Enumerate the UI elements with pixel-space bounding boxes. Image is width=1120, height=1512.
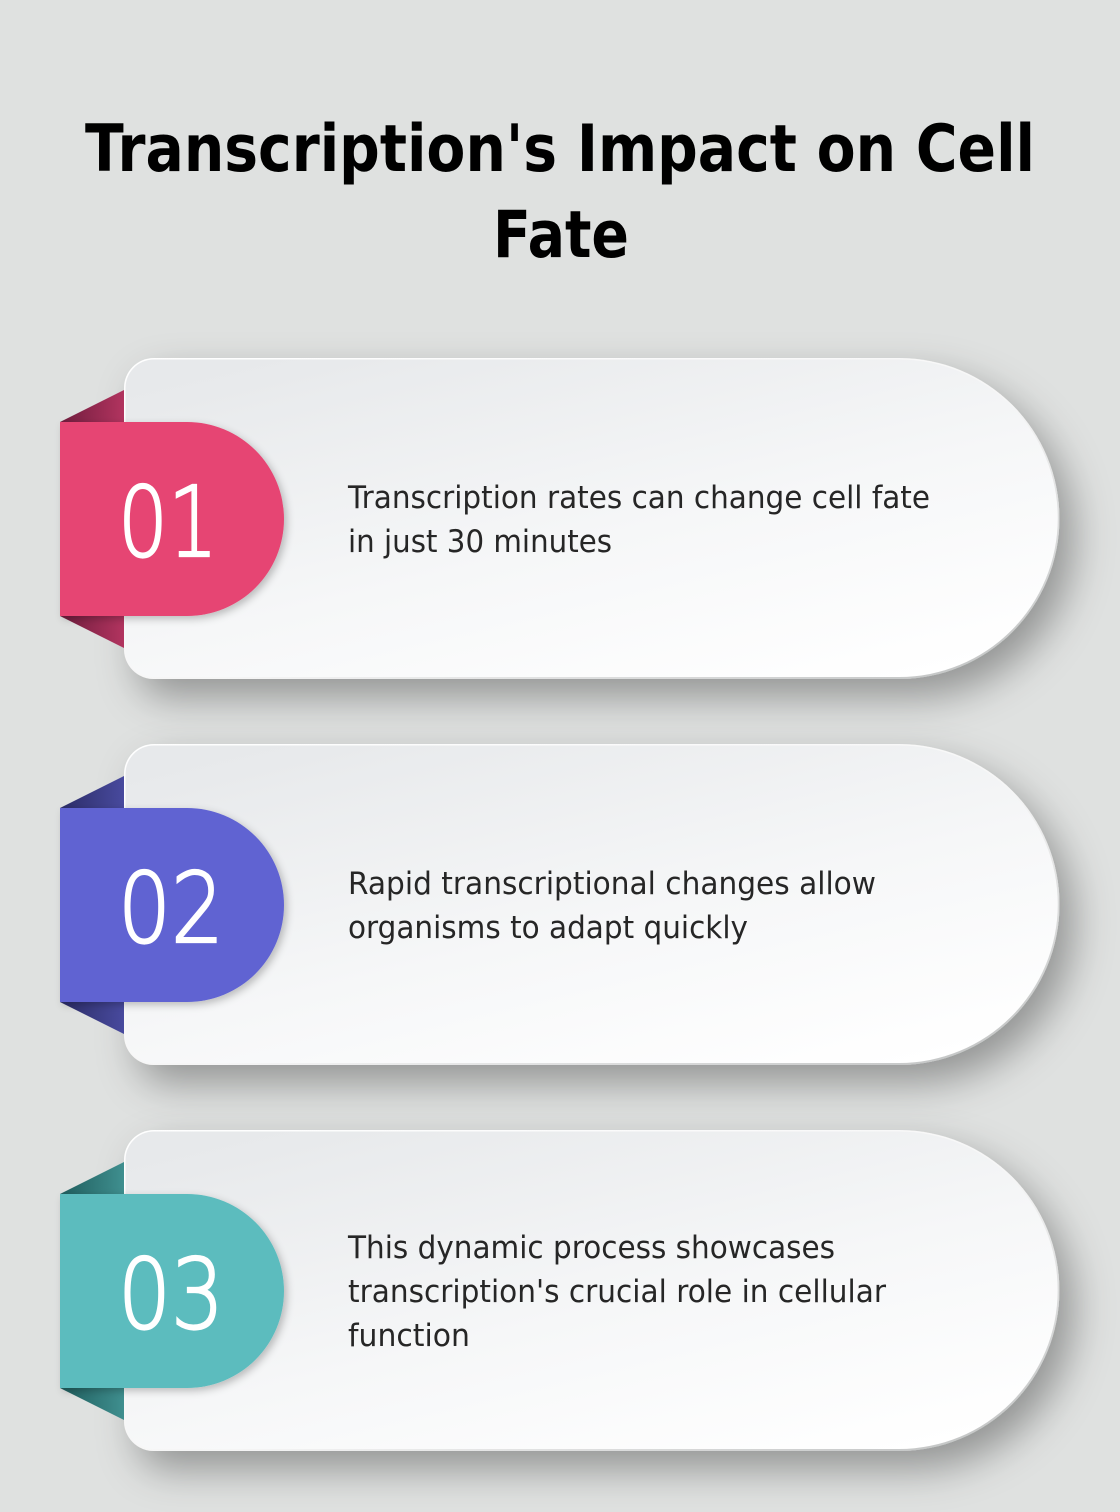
number badge 03 <box>60 1194 284 1388</box>
text 01: in just 30 minutes <box>348 524 612 560</box>
text 02 <box>348 866 876 946</box>
number 03: 03 <box>118 1238 224 1351</box>
panel: step 03 <box>60 1130 1059 1451</box>
panel: step 02 <box>60 744 1060 1065</box>
text 03: transcription's crucial role in cellular <box>348 1274 886 1310</box>
ribbon fold bottom 01 <box>60 616 124 648</box>
ribbon fold bottom 02 <box>60 1002 124 1034</box>
ribbon fold top 01 <box>60 390 124 422</box>
panel: step 01 <box>60 358 1059 679</box>
card 02 face <box>126 746 1058 1063</box>
text 03: This dynamic process showcases <box>347 1230 835 1266</box>
number badge 01 <box>60 422 284 616</box>
card 02 <box>124 744 1060 1065</box>
text 01 <box>347 480 930 560</box>
card 01 <box>124 358 1059 679</box>
ribbon fold top 02 <box>60 776 124 808</box>
number 02: 02 <box>118 852 224 965</box>
ribbon fold top 03 <box>60 1162 124 1194</box>
card 03 <box>124 1130 1059 1451</box>
number badge 02 <box>60 808 284 1002</box>
title <box>85 112 1035 273</box>
card 03 face <box>126 1132 1058 1449</box>
text 03: function <box>348 1318 470 1354</box>
text 02: organisms to adapt quickly <box>348 910 748 946</box>
text 03 <box>347 1230 886 1354</box>
title: Fate <box>493 198 629 273</box>
card 01 face <box>126 360 1058 677</box>
text 02: Rapid transcriptional changes allow <box>348 866 876 902</box>
number 01: 01 <box>118 466 218 579</box>
ribbon fold bottom 03 <box>60 1388 124 1420</box>
text 01: Transcription rates can change cell fate <box>347 480 930 516</box>
